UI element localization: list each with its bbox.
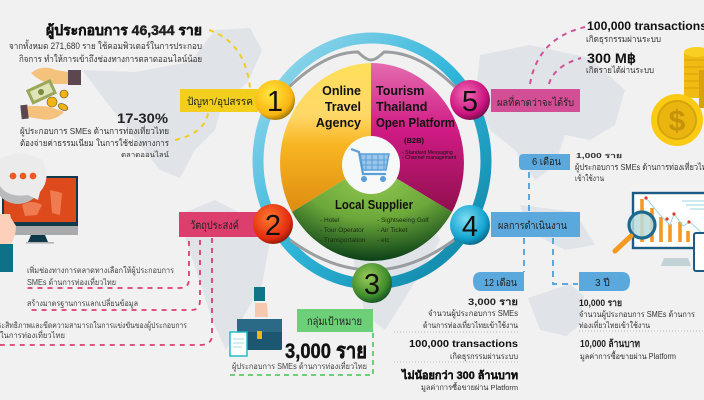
pink dashed objective connectors [0,238,212,345]
dotted separators [394,331,704,362]
heading: tourism thailand open platform: Tourism [376,84,424,98]
pink dashed outcome connectors [530,27,585,84]
label 5: expected outcomes [491,89,580,112]
icon: gold coins [651,47,704,146]
number badge 5 [450,80,490,120]
6 month tag [519,154,570,170]
grey inner ring with notch [288,52,456,270]
heading: online travel agency [316,84,361,130]
heading: tourism thailand open platform: Thailand [376,100,427,114]
3 year tag: 3 ปี [595,277,610,289]
17-30% stat text [20,111,169,159]
heading: tourism thailand open platform: - Channel management [402,155,457,161]
icon: hands and money [20,68,81,120]
pie: online travel agency [280,63,371,212]
3 year results: มูลค่าการซื้อขายผ่าน Platform [580,350,676,362]
label 5: expected outcomes: ผลที่คาดว่าจะได้รับ [497,95,574,109]
top-left stats text block: ผู้ประกอบการ 46,344 ราย [46,22,202,39]
pie: local supplier [292,163,452,261]
world map silhouette [82,28,625,350]
12 month tag: 12 เดือน [484,277,517,289]
label 1: problems: ปัญหา/อุปสรรค [187,96,253,108]
17-30% stat text: ตลาดออนไลน์ [121,150,169,159]
number badge 4: 4 [462,211,478,243]
outcome text: 300 M฿ [587,51,636,66]
heading and list: local supplier: - Hotel [320,217,340,224]
12 month results: เกิดธุรกรรมผ่านระบบ [450,352,518,361]
12 month results: ไม่น้อยกว่า 300 ล้านบาท [400,368,518,382]
outer blue ring [258,38,486,284]
target group panel: ผู้ประกอบการ SMEs ด้านการท่องเที่ยวไทย [232,360,367,372]
icon: shopping cart [342,136,400,194]
6 month text: 1,000 ราย [576,153,622,160]
heading and list: local supplier: - Tour Operator [320,227,365,234]
number badge 2 [253,204,293,244]
17-30% stat text: ผู้ประกอบการ SMEs ด้านการท่องเที่ยวไทย [20,125,169,137]
top-left stats text block: กิจการ ทำให้การเข้าถึงช่องทางการตลาดออนไลน์น้อย [19,53,202,64]
outcome text: เกิดธุรกรรมผ่านระบบ [586,34,661,45]
yellow dashed connectors [175,30,250,140]
17-30% stat text: ต้องจ่ายค่าธรรมเนียม ในการใช้ช่องทางการ [20,138,169,148]
top-left stats text block [9,22,202,64]
12 month results: ด้านการท่องเที่ยวไทยเข้าใช้งาน [423,319,518,330]
heading and list: local supplier: Local Supplier [335,198,413,212]
label 2: objectives [179,212,258,237]
target group panel [230,309,373,375]
pie: tourism thailand open platform [371,63,464,212]
heading: online travel agency: Agency [316,116,361,130]
12 month tag [473,272,524,291]
objectives text: เพิ่มช่องทางการตลาดทางเลือกให้ผู้ประกอบการ [27,264,175,276]
12 month results [400,297,518,392]
3 year results [579,298,696,362]
heading: online travel agency: Online [322,84,361,98]
6 month text [575,153,704,183]
blue dashed timeline connectors [524,172,578,284]
outcome text [586,19,704,75]
number badge 2: 2 [265,210,281,242]
3 year results: จำนวนผู้ประกอบการ SMEs ด้านการ [579,310,696,320]
icon: gold coins: $ [669,105,686,138]
heading: tourism thailand open platform: (B2B) [404,136,425,145]
target group panel: กลุ่มเป้าหมาย [307,316,362,328]
top-left stats text block: จากทั้งหมด 271,680 ราย ใช้คอมพิวเตอร์ในการประกอบ [9,39,202,51]
number badge 5: 5 [462,86,478,118]
label 4: results [491,212,580,237]
number badge 4 [450,205,490,245]
heading and list: local supplier: - Transportation [320,237,366,244]
number badge 3 [352,263,392,303]
heading and list: local supplier: - Sightseeing Golf [377,217,429,224]
3 year results: 10,000 ล้านบาท [580,338,640,350]
outcome text: 100,000 transactions [587,19,704,33]
heading and list: local supplier [320,198,429,244]
heading: tourism thailand open platform [376,84,457,161]
central diagram [253,38,490,303]
objectives text: สร้างมาตรฐานการแลกเปลี่ยนข้อมูล [27,297,138,309]
12 month results: 3,000 ราย [468,297,518,308]
label 1: problems [180,89,258,112]
heading and list: local supplier: - etc [377,237,390,244]
3 year results: ท่องเที่ยวไทยเข้าใช้งาน [579,319,650,330]
number badge 1: 1 [267,86,283,118]
outcome text: เกิดรายได้ผ่านระบบ [586,65,654,75]
target group panel: 3,000 ราย [285,340,367,363]
17-30% stat text: 17-30% [117,111,168,126]
objectives text: SMEs ด้านการท่องเที่ยวไทย [27,276,116,287]
icon: analytics monitor with magnifier [615,193,704,271]
icon: computer with map and speech bubble [0,153,78,272]
objectives text [0,264,188,340]
12 month results: จำนวนผู้ประกอบการ SMEs [428,309,518,319]
number badge 3: 3 [364,269,380,301]
6 month text: เข้าใช้งาน [575,174,604,183]
heading and list: local supplier: - Air Ticket [377,227,408,234]
3 year tag [579,272,630,291]
label 4: results: ผลการดำเนินงาน [498,220,567,232]
heading: tourism thailand open platform: Open Platform [376,116,455,130]
12 month results: มูลค่าการซื้อขายผ่าน Platform [421,382,518,392]
number badge 1 [255,80,295,120]
6 month tag: 6 เดือน [532,156,561,168]
12 month results: 100,000 transactions [409,338,518,350]
heading: online travel agency: Travel [325,100,361,114]
heading: tourism thailand open platform: - Standard Messaging [402,150,453,156]
label 2: objectives: วัตถุประสงค์ [190,219,239,232]
3 year results: 10,000 ราย [579,298,622,309]
icon: briefcase with clipboard [230,287,282,356]
